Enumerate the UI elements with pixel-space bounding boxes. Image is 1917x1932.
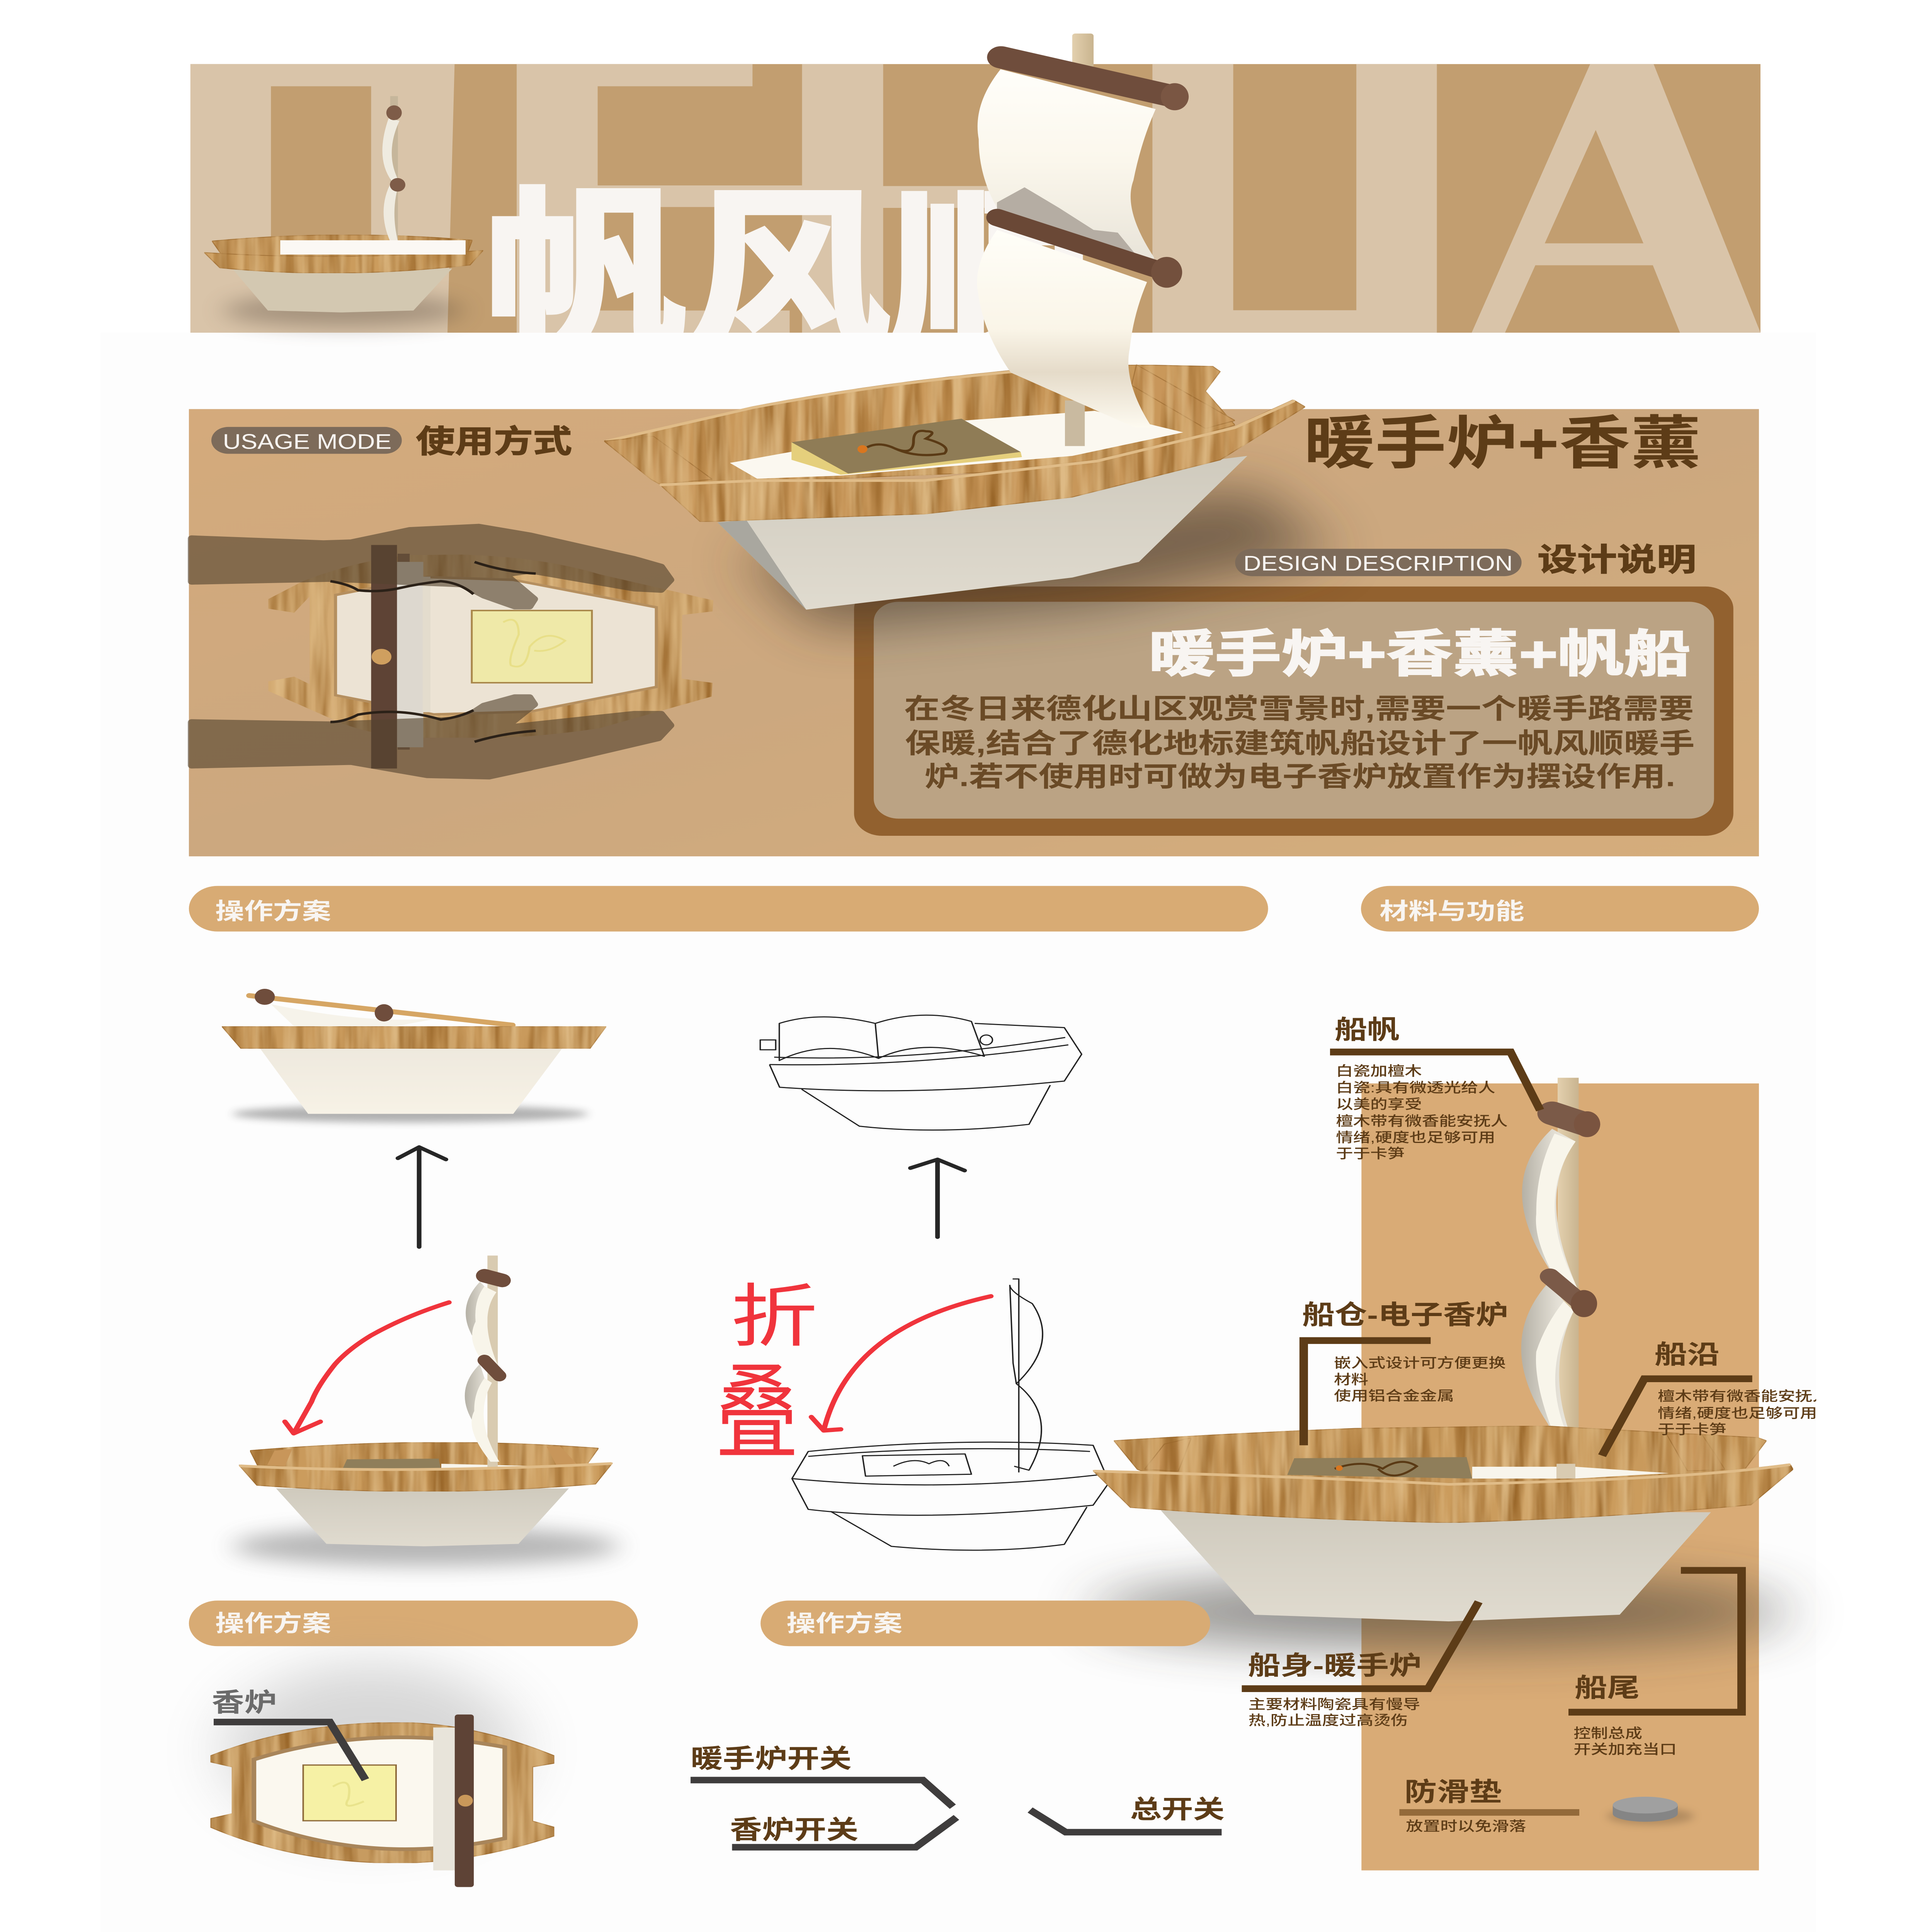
banner title: 帆风顺 xyxy=(485,177,1093,372)
arrow: up right xyxy=(910,1160,964,1237)
callout: sail: 情绪,硬度也足够可用 xyxy=(1336,1130,1495,1145)
callout: stern: 开关加充当口 xyxy=(1573,1742,1677,1757)
render: boat with raised sail xyxy=(232,1255,619,1566)
callout: anti-slip pad: 防滑垫 xyxy=(1404,1778,1502,1806)
callout: warmer switch: 暖手炉开关 xyxy=(691,1744,852,1773)
usage panel background xyxy=(189,409,1759,856)
background wash xyxy=(100,333,1816,1932)
box description text xyxy=(904,694,1695,792)
callout: master switch: 总开关 xyxy=(1130,1795,1225,1823)
callout: stern: 控制总成 xyxy=(1573,1726,1642,1741)
folded boat render xyxy=(222,989,606,1122)
callout: gunwale: 情绪,硬度也足够可用 xyxy=(1658,1406,1817,1421)
callout: master switch xyxy=(1030,1795,1225,1832)
box title: 暖手炉+香薰+帆船 xyxy=(1148,626,1691,682)
callout: anti-slip pad xyxy=(1399,1778,1579,1834)
callout: gunwale: 船沿 xyxy=(1655,1340,1720,1369)
red handwritten label: fold: 叠 xyxy=(715,1355,799,1471)
callout: incense burner xyxy=(212,1688,366,1780)
large boat xyxy=(1093,1426,1793,1621)
callout: cabin incense burner: 材料 xyxy=(1334,1372,1368,1387)
callout: cabin incense burner: 嵌入式设计可方便更换 xyxy=(1334,1355,1506,1371)
section bar: materials xyxy=(1361,886,1759,932)
section bar: operation xyxy=(189,886,1268,932)
icon: anti-slip disc xyxy=(1607,1797,1694,1825)
main boat xyxy=(604,365,1305,610)
section bar: materials: 材料与功能 xyxy=(1379,899,1524,924)
callout: warmer switch xyxy=(691,1744,953,1807)
callout: hull hand warmer: 热,防止温度过高烫伤 xyxy=(1249,1713,1408,1728)
callout: gunwale: 檀木带有微香能安抚人 xyxy=(1658,1389,1830,1404)
box description text: 炉.若不使用时可做为电子香炉放置作为摆设作用. xyxy=(924,761,1675,792)
materials background panel xyxy=(1361,1083,1759,1871)
callout: cabin incense burner xyxy=(1302,1301,1508,1445)
usage mode heading: 使用方式 xyxy=(416,423,572,459)
callout: cabin incense burner: 使用铝合金金属 xyxy=(1334,1388,1454,1404)
design description heading: DESIGN DESCRIPTION xyxy=(1243,552,1513,575)
usage mode heading xyxy=(211,423,572,459)
callout: hull hand warmer xyxy=(1242,1602,1479,1728)
callout: anti-slip pad: 放置时以免滑落 xyxy=(1406,1819,1526,1834)
callout: incense burner: 香炉 xyxy=(212,1688,277,1717)
callout: stern: 船尾 xyxy=(1575,1673,1640,1702)
box description text: 在冬日来德化山区观赏雪景时,需要一个暖手路需要 xyxy=(904,694,1694,724)
callout: stern xyxy=(1568,1570,1742,1757)
callout: sail: 船帆 xyxy=(1335,1015,1400,1044)
line drawing: boat with raised sail xyxy=(792,1279,1109,1550)
callout: hull hand warmer: 船身-暖手炉 xyxy=(1248,1651,1421,1680)
usage top-view boat with hands xyxy=(192,527,713,776)
banner small boat xyxy=(204,96,483,327)
design description heading xyxy=(1235,542,1696,577)
callout: incense switch xyxy=(730,1816,956,1847)
callout: sail: 檀木带有微香能安抚人 xyxy=(1336,1114,1508,1129)
section bar: operation lower left xyxy=(189,1600,638,1646)
section bar: operation: 操作方案 xyxy=(215,899,331,924)
callout: gunwale: 于于卡笋 xyxy=(1658,1422,1726,1437)
section bar: operation lower left: 操作方案 xyxy=(215,1611,331,1636)
design description heading: 设计说明 xyxy=(1538,542,1696,577)
callout: sail: 以美的享受 xyxy=(1336,1097,1422,1112)
large boat mast and sail xyxy=(1521,1078,1600,1475)
callout: sail: 白瓷加檀木 xyxy=(1336,1063,1422,1079)
top-view boat xyxy=(211,1714,554,1887)
big sail xyxy=(977,34,1189,428)
callout: sail: 白瓷:具有微透光给人 xyxy=(1336,1080,1495,1095)
red handwritten label: fold: 折 xyxy=(731,1278,818,1355)
main shadow xyxy=(743,487,1332,628)
line drawing: folded boat xyxy=(760,1015,1082,1130)
arrow: up left xyxy=(398,1147,446,1247)
callout: incense switch: 香炉开关 xyxy=(730,1816,858,1845)
shadow: top-view boat xyxy=(225,1663,519,1836)
banner: giant letters xyxy=(191,64,1761,333)
large boat shadow xyxy=(1092,1577,1788,1646)
callout: gunwale xyxy=(1602,1340,1830,1456)
section bar: operation lower right xyxy=(760,1600,1210,1646)
box description text: 保暖,结合了德化地标建筑帆船设计了一帆风顺暖手 xyxy=(905,728,1695,759)
red arrow left xyxy=(285,1303,449,1434)
callout: sail xyxy=(1330,1015,1540,1161)
heating and incense heading: 暖手炉+香薰 xyxy=(1304,411,1702,476)
callout: hull hand warmer: 主要材料陶瓷具有慢导 xyxy=(1249,1697,1420,1712)
description box xyxy=(854,587,1733,836)
red arrow right xyxy=(811,1296,991,1430)
callout: sail: 于于卡笋 xyxy=(1336,1146,1405,1161)
usage mode heading: USAGE MODE xyxy=(223,430,391,454)
section bar: operation lower right: 操作方案 xyxy=(787,1611,902,1636)
red handwritten label: fold xyxy=(715,1278,818,1471)
callout: cabin incense burner: 船仓-电子香炉 xyxy=(1302,1301,1508,1330)
